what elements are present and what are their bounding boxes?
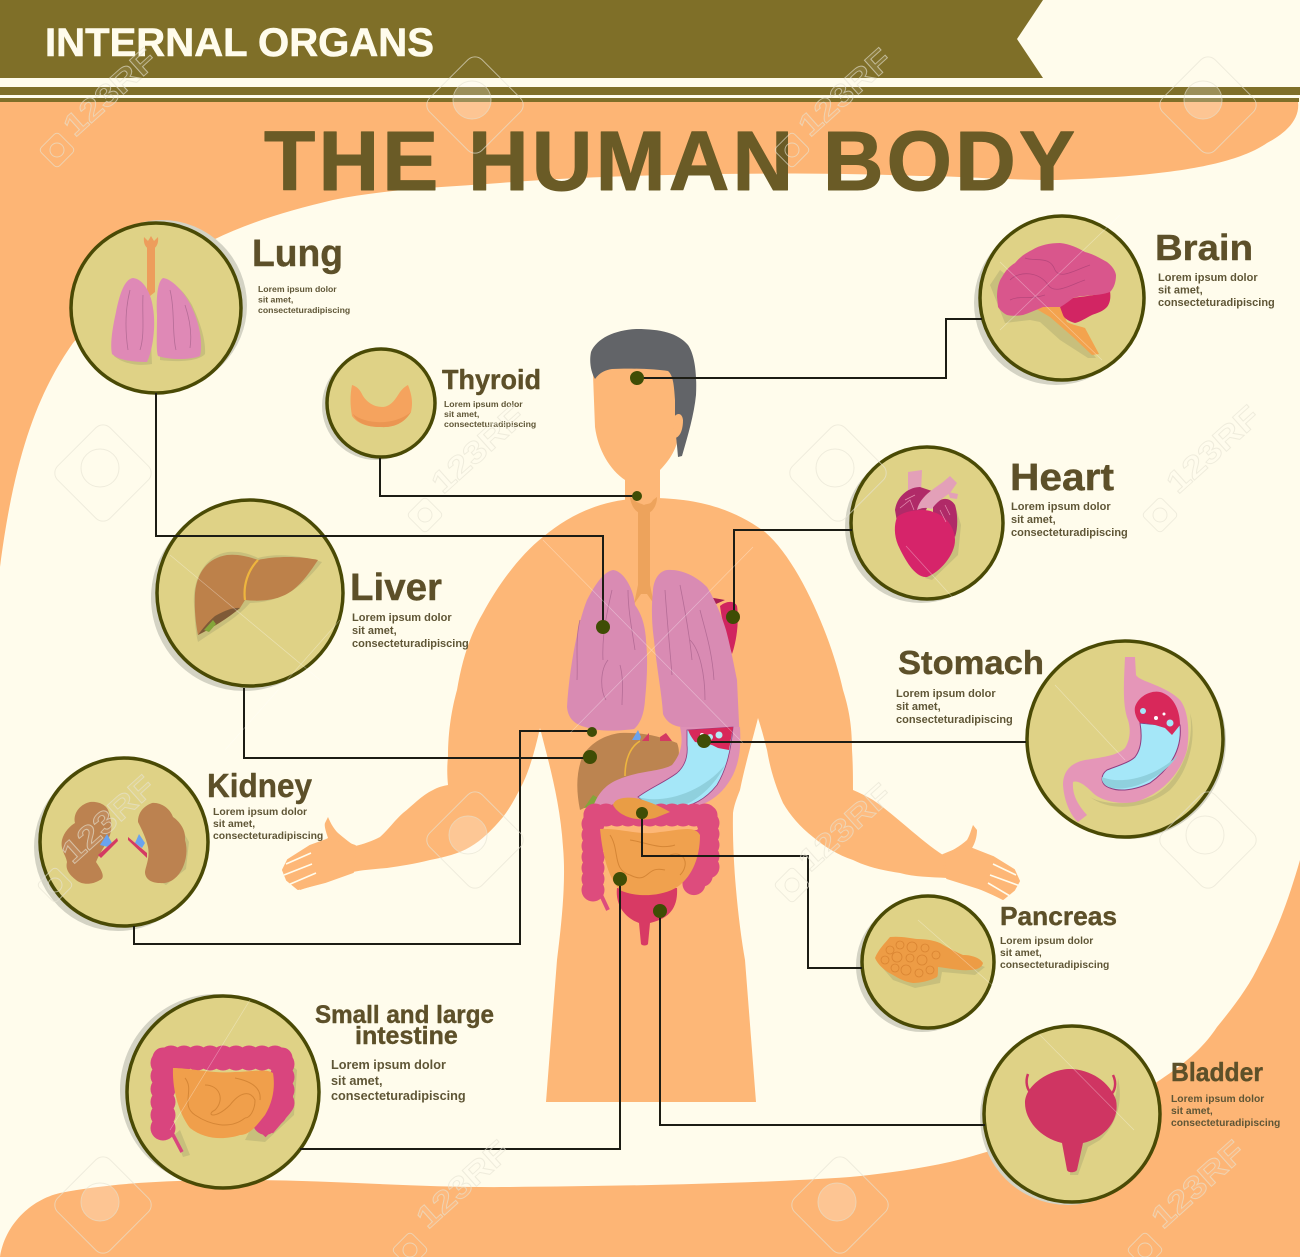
hair	[590, 329, 696, 457]
text: stomach description: Lorem ipsum dolor	[896, 688, 996, 700]
text: pancreas description: sit amet,	[1000, 948, 1042, 959]
connector lines	[134, 319, 1026, 1149]
text: heart description: consecteturadipiscing	[1011, 527, 1128, 539]
text: kidney description: consecteturadipiscing	[213, 831, 323, 842]
icon: intestines	[163, 1058, 297, 1157]
panel: small and large intestine	[120, 994, 494, 1188]
icon: lungs	[111, 236, 205, 365]
left lung	[567, 570, 647, 731]
icon: thyroid	[350, 385, 412, 427]
heading: Liver: Liver	[350, 567, 442, 609]
icon: liver	[194, 552, 322, 642]
heading: Heart: Heart	[1010, 457, 1114, 499]
rectum and bladder	[617, 888, 677, 946]
text: lung description: consecteturadipiscing	[258, 305, 350, 315]
panel: heart	[845, 447, 1128, 603]
right hand	[943, 846, 1020, 899]
text: 123RF	[791, 777, 899, 878]
heading: Brain: Brain	[1155, 227, 1253, 268]
icon: stomach	[1063, 657, 1193, 822]
kidney hints	[632, 730, 672, 741]
title: THE HUMAN BODY	[264, 114, 1075, 208]
icon: heart	[895, 470, 961, 580]
text: brain description: consecteturadipiscing	[1158, 297, 1275, 309]
text: 123RF	[56, 42, 164, 143]
panel: brain	[974, 216, 1275, 385]
text: 123RF	[1144, 1134, 1252, 1235]
text: 123RF	[1159, 399, 1267, 500]
text: kidney description: sit amet,	[213, 819, 255, 830]
text: stomach description: sit amet,	[896, 701, 941, 713]
heading: Lung: Lung	[252, 233, 343, 275]
text: liver description: consecteturadipiscing	[352, 638, 469, 650]
torso and arms	[296, 498, 1000, 1102]
icon: kidneys	[62, 802, 189, 885]
text: pancreas description: consecteturadipiscing	[1000, 960, 1109, 971]
panel: stomach	[896, 641, 1226, 839]
small intestine	[600, 829, 700, 895]
head and neck	[593, 350, 678, 505]
text: 123RF	[409, 1134, 517, 1235]
icon: brain	[990, 243, 1116, 358]
large intestine	[593, 815, 708, 910]
text: thyroid description: Lorem ipsum dolor	[444, 399, 523, 409]
text: kidney description: Lorem ipsum dolor	[213, 807, 307, 818]
panel: pancreas	[856, 896, 1117, 1032]
heading: Thyroid: Thyroid	[442, 364, 541, 395]
text: 123RF	[424, 399, 532, 500]
text: intestine description: sit amet,	[331, 1074, 382, 1088]
text: liver description: sit amet,	[352, 625, 397, 637]
panel: liver	[151, 500, 469, 691]
panel: bladder	[980, 1026, 1280, 1205]
text: brain description: Lorem ipsum dolor	[1158, 272, 1258, 284]
panel: kidney	[34, 758, 323, 931]
icon: pancreas	[875, 937, 985, 988]
heading: Stomach: Stomach	[898, 644, 1044, 681]
text: intestine description: Lorem ipsum dolor	[331, 1058, 446, 1072]
panel: lung	[71, 220, 350, 393]
text: stomach description: consecteturadipiscing	[896, 714, 1013, 726]
header label: INTERNAL ORGANS	[45, 21, 434, 65]
background: top orange swoosh	[0, 102, 1298, 567]
text: 123RF	[54, 769, 162, 870]
text: thyroid description: sit amet,	[444, 409, 479, 419]
header double rule	[0, 87, 1300, 102]
heading: Pancreas: Pancreas	[1000, 901, 1117, 931]
ear	[672, 414, 683, 438]
text: brain description: sit amet,	[1158, 284, 1203, 296]
panel: thyroid	[322, 349, 541, 460]
heading: Bladder: Bladder	[1171, 1057, 1263, 1087]
text: thyroid description: consecteturadipiscing	[444, 419, 536, 429]
background: bottom orange swoosh	[0, 860, 1300, 1257]
text: lung description: sit amet,	[258, 294, 293, 304]
heading: small and large intestine: intestine	[355, 1022, 458, 1050]
left hand	[283, 838, 355, 889]
trachea and thyroid	[630, 497, 657, 604]
text: bladder description: consecteturadipiscing	[1171, 1118, 1280, 1129]
human body figure	[283, 329, 1020, 1102]
text: bladder description: Lorem ipsum dolor	[1171, 1094, 1264, 1105]
connector dots	[583, 371, 740, 918]
text: liver description: Lorem ipsum dolor	[352, 612, 452, 624]
liver	[577, 733, 679, 810]
text: lung description: Lorem ipsum dolor	[258, 284, 337, 294]
text: intestine description: consecteturadipiscing	[331, 1089, 466, 1103]
heart behind lung	[708, 597, 738, 654]
text: pancreas description: Lorem ipsum dolor	[1000, 936, 1093, 947]
stomach	[593, 727, 740, 809]
heading: Kidney: Kidney	[207, 767, 313, 804]
header ribbon	[0, 0, 1043, 78]
text: heart description: sit amet,	[1011, 514, 1056, 526]
heading: small and large intestine: Small and large	[315, 1001, 494, 1029]
text: heart description: Lorem ipsum dolor	[1011, 501, 1111, 513]
pancreas	[613, 798, 670, 819]
text: bladder description: sit amet,	[1171, 1106, 1213, 1117]
text: 123RF	[791, 42, 899, 143]
icon: bladder	[1025, 1069, 1120, 1175]
right lung	[652, 570, 740, 745]
